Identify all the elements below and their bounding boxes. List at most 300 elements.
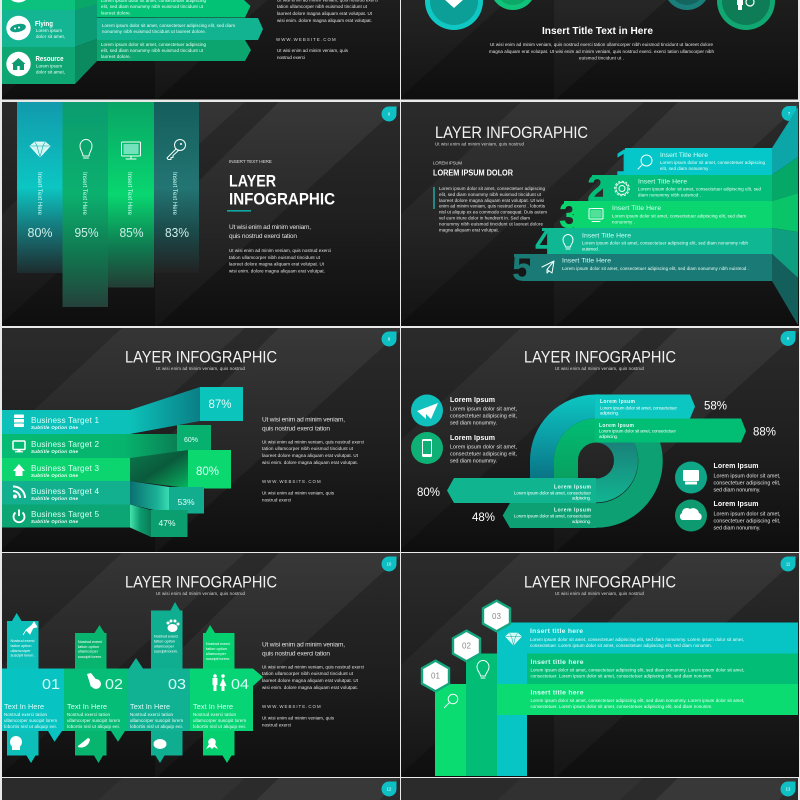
circle: green: [490, 0, 536, 10]
target 5 bar: [2, 504, 188, 537]
icon: bulb: [80, 140, 92, 158]
icon: gem: [30, 142, 50, 157]
target 4 bar: [2, 481, 204, 514]
step 3: Insert Title Here: [612, 205, 661, 212]
step 2: [587, 168, 772, 209]
segment 4: [190, 668, 263, 731]
text block: [229, 224, 331, 274]
text: upper left pair: consectetuer adipiscing elit,: [450, 414, 517, 420]
page badge: [780, 331, 796, 346]
target 2 bar: [2, 425, 211, 458]
step 4: euismod .: [582, 246, 600, 252]
text: upper left pair: Lorem Ipsum: [450, 397, 495, 404]
upper tab 4: tation option: [206, 647, 227, 651]
text block: laoreet dolore magna aliquam erat volutpat. Ut: [262, 453, 359, 458]
layered block with Flying and Resource: [2, 0, 97, 84]
text: upper left pair: sed diam nonummy.: [450, 458, 497, 464]
label: Resource: dolor sit amet,: [36, 70, 65, 74]
right text block: WWW.WEBSITE.COM: [276, 37, 337, 42]
icon: key: [167, 140, 186, 160]
subtitle: Ut wisi enim ad minim veniam, quis nostrud: [435, 142, 525, 146]
step 4: Insert Title Here: [582, 232, 631, 240]
segment 4: Nostrud exerci tation: [193, 712, 237, 717]
target labels: Business Target 2: [31, 440, 99, 449]
heading: LAYER INFOGRAPHIC: [524, 348, 676, 366]
heading: INFOGRAPHIC: [229, 190, 335, 208]
bar text 2: [530, 659, 744, 678]
step 1: elit, sed diam nonummy .: [660, 166, 711, 171]
text block: tation ullamcorper nibh euismod tincidunt ut: [262, 446, 354, 451]
column 2: 95%: [62, 102, 108, 307]
icon: airship: [6, 16, 31, 40]
icon: home: [13, 464, 25, 476]
heading: Insert Title Text in Here: [542, 25, 653, 37]
body text: euismod tincidunt ut .: [579, 56, 624, 60]
panel: slide 10: [2, 553, 400, 777]
step 2: 2: [587, 168, 608, 209]
icon: gem: [506, 633, 522, 645]
upper tab 1: tation option: [10, 644, 32, 648]
text block: Ut wisi enim ad minim veniam,: [262, 416, 345, 424]
text: lower right pair: consectetuer adipiscing elit,: [714, 518, 780, 524]
upper tab 4: suscipit lorem.: [206, 657, 230, 661]
hexagon 02: [453, 631, 480, 661]
label: Resource: Lorem ipsum: [36, 64, 62, 68]
segment 1: [2, 668, 64, 742]
layer columns and bars: [435, 622, 798, 776]
outer dark green band, 48%: [503, 406, 650, 528]
step 1: Lorem ipsum dolor sit amet, consectetuer adipiscing: [660, 160, 766, 165]
hexagon 03: 03: [492, 612, 501, 621]
side heading: [433, 160, 513, 178]
side heading: LOREM IPSUM: [433, 160, 462, 166]
lower tab 1: [7, 731, 38, 763]
arrow 1 with text: laoreet dolore.: [101, 10, 131, 16]
upper tab 3: ullamcorper: [154, 644, 175, 648]
page badge: [780, 782, 796, 796]
text: lower right pair: sed diam nonummy.: [714, 526, 760, 532]
page badge: 9: [787, 336, 790, 341]
side heading: LOREM IPSUM DOLOR: [433, 168, 513, 178]
icon circle: cloud: [675, 500, 707, 532]
segment 3: Nostrud exerci tation: [130, 712, 174, 717]
icon: monitor: [13, 441, 25, 452]
bar text 3: Insert title here: [530, 690, 584, 696]
hexagon 01: [422, 661, 449, 691]
panel: slide with circles and title (cropped): [401, 0, 798, 100]
upper tab 2: ullamcorper: [78, 650, 99, 654]
arrow 3 with text: laoreet dolore.: [101, 54, 131, 59]
upper tab 1: ullamcorper: [10, 649, 31, 653]
upper tab 2: Nostrud exerci: [78, 640, 102, 644]
inner teal-green band, 80%: [447, 430, 626, 503]
target labels: Subtitle Option One: [31, 425, 79, 430]
right text block: [276, 0, 378, 60]
band labels: Lorem ipsum dolor sit amet, consectetuer: [514, 490, 592, 495]
text: upper left pair: Lorem Ipsum: [450, 435, 495, 442]
step 3: 3: [559, 195, 580, 236]
text block: [262, 416, 364, 502]
upper tab 2: suscipit lorem.: [78, 655, 102, 659]
text: upper left pair: consectetuer adipiscing elit,: [450, 452, 517, 458]
subtitle: Ut wisi enim ad minim veniam, quis nostrud: [555, 366, 645, 371]
upper tab 4: Nostrud exerci: [206, 642, 230, 646]
text block: wisi enim. dolore magna aliquam erat volutpat.: [262, 460, 358, 465]
spiral chart: [447, 394, 746, 528]
icon: people: [212, 674, 226, 691]
bar text 2: consectetuer. Lorem ipsum dolor sit amet, consectetuer adipiscing elit, sed diam nonumm.: [530, 674, 712, 678]
target 1 bar: 87%: [208, 399, 232, 411]
right text block: tation ullamcorper nibh euismod tincidunt ut: [277, 4, 368, 9]
percentages: 48%: [472, 512, 495, 524]
percentages: 58%: [704, 400, 727, 412]
label: Flying: Lorem ipsum: [36, 28, 62, 33]
text block: Ut wisi enim ad minim veniam,: [229, 224, 311, 231]
page badge: 12: [387, 786, 392, 792]
page badge: 8: [388, 336, 391, 342]
column 3: 85%: 85%: [120, 226, 144, 240]
segment 4: 04: [231, 677, 249, 693]
step 5: [512, 248, 772, 288]
heading: LAYER INFOGRAPHIC: [125, 572, 277, 592]
right text block: nostrud exerci: [277, 55, 305, 60]
arrow 2 with text: Lorem ipsum dolor sit amet, consectetuer adipiscing elit, sed diam: [102, 23, 235, 28]
icon circle: phone: [411, 432, 443, 464]
text: lower right pair: Lorem ipsum dolor sit amet,: [714, 512, 780, 518]
page badge: [780, 556, 796, 572]
paragraph: elit, sed diam nonummy nibh euismod tincidunt ut: [439, 192, 542, 197]
band labels: Lorem Ipsum: [554, 508, 592, 514]
text block: WWW.WEBSITE.COM: [262, 479, 322, 484]
segment 1: ullamcorper suscipit lorem: [4, 718, 57, 723]
lower tab 2: [75, 731, 106, 763]
segment 1: Nostrud exerci tation: [4, 712, 48, 717]
circle: dark teal: [664, 0, 710, 10]
upper tab 1: [7, 613, 38, 669]
icon: cupcake: [10, 736, 22, 750]
upper tab 2: tation option: [78, 645, 99, 649]
target labels: Subtitle Option One: [31, 449, 79, 454]
body text: Ut wisi enim ad minim veniam, quis nostrud exerci tation ullamcorper nibh euismod tincidunt ut laoreet dolore: [490, 42, 713, 47]
panel: slide 9: [401, 328, 799, 552]
band labels: Lorem Ipsum: [599, 423, 635, 429]
paragraph: vel eum iriure dolor in hendrerit in. Sed diam: [439, 216, 530, 220]
arrow 3 with text: Lorem ipsum dolor sit amet, consectetuer adipiscing: [101, 42, 207, 47]
panel: slide 12 (cropped): [2, 778, 400, 800]
text block: nostrud exerci: [262, 722, 291, 728]
column 1: 80%: 80%: [28, 226, 52, 240]
segment 4: Text In Here: [193, 702, 233, 711]
text block: [262, 642, 364, 728]
text block: wisi enim. dolore magna aliquam erat volutpat.: [262, 685, 358, 690]
panel: slide 11: [401, 553, 799, 777]
band labels: Lorem ipsum dolor sit amet, consectetuer: [600, 406, 678, 410]
bar text 2: Lorem ipsum dolor sit amet, consectetuer adipiscing elit, sed diam nonummy. Lorem ipsum dolor sit amet,: [530, 668, 744, 672]
upper tab 4: ullamcorper: [206, 652, 227, 656]
text: lower right pair: Lorem Ipsum: [714, 463, 758, 470]
text block: laoreet dolore magna aliquam erat volutpat. Ut: [229, 262, 325, 266]
icon: server: [14, 414, 24, 427]
lower tab 4: [203, 731, 234, 763]
step 2: Insert Title Here: [638, 178, 687, 186]
column 2: 95%: Insert Text Here: [81, 172, 87, 216]
target 3 bar: 80%: [196, 466, 219, 478]
upper tab 4: [203, 625, 234, 669]
column 2: 95%: 95%: [74, 226, 98, 240]
column 3: 85%: Insert Text Here: [126, 172, 132, 216]
icon: pin: [23, 622, 37, 635]
step 5: 5: [512, 248, 533, 288]
target 4 bar: 53%: [178, 497, 195, 507]
text block: wisi enim. dolore magna aliquam erat volutpat.: [229, 268, 325, 274]
step 4: 4: [535, 221, 556, 262]
step 4: [535, 221, 772, 262]
text block: Ut wisi enim ad minim veniam, quis: [262, 716, 335, 720]
page badge: [382, 782, 396, 796]
page badge: 7: [788, 111, 791, 116]
column 4: 83%: 83%: [165, 226, 189, 240]
subtitle: Ut wisi enim ad minim veniam, quis nostrud: [156, 591, 246, 596]
text: lower right pair: sed diam nonummy.: [714, 488, 760, 494]
icon: bulb: [563, 234, 573, 249]
page badge: 10: [387, 562, 392, 566]
text block: tation ullamcorper nibh euismod tincidunt ut: [229, 255, 321, 260]
text: upper left pair: [450, 397, 517, 464]
band labels: Lorem Ipsum: [554, 484, 592, 490]
text block: Ut wisi enim ad minim veniam, quis nostrud exerci: [262, 664, 364, 670]
bar text 3: [530, 690, 744, 709]
paragraph: nonummy nibh euismod tincidunt ut laoreet dolore: [439, 222, 543, 226]
step 2: Lorem ipsum dolor sit amet, consectetuer adipiscing elit, sed: [638, 186, 762, 191]
right text block: wisi enim. dolore magna aliquam erat volutpat.: [277, 18, 372, 23]
upper tab 3: suscipit lorem.: [154, 650, 178, 654]
paragraph: magna aliquam erat volutpat.: [439, 228, 499, 232]
segment 2: Nostrud exerci tation: [67, 712, 111, 717]
circle: teal gem: [425, 0, 483, 30]
band labels: Lorem Ipsum: [600, 399, 636, 405]
icon: paper plane: [542, 261, 554, 273]
target 1 bar: [2, 387, 243, 434]
target labels: Business Target 1: [31, 416, 99, 425]
icon: octopus: [206, 738, 218, 749]
panel: slide 6: [2, 102, 400, 326]
segment 4: ullamcorper suscipit lorem: [193, 718, 246, 723]
body text: [489, 42, 714, 60]
step 3: [559, 195, 772, 236]
text block: nostrud exerci: [262, 498, 291, 502]
panel: slide 7: [401, 102, 799, 326]
segment 3: lobortis nisl ut aliquip eei.: [130, 724, 183, 729]
bar text 1: Insert title here: [530, 628, 583, 635]
arrow 2 with text: nonummy nibh euismod tincidunt ut laoreet dolore.: [102, 29, 206, 34]
segment 1: 01: [42, 677, 60, 693]
segment 3: Text In Here: [130, 702, 170, 711]
text block: quis nostrud exerci tation: [262, 650, 330, 658]
panel: slide 8: [2, 328, 400, 552]
heading: LAYER: [229, 172, 276, 190]
paragraph: [439, 186, 547, 232]
text block: tation ullamcorper nibh euismod tincidunt ut: [262, 671, 354, 676]
page badge: 6: [388, 112, 391, 116]
arrow 2 with text: [97, 18, 263, 40]
label: Flying: [35, 21, 65, 39]
side fan wedges: [772, 107, 798, 325]
band labels: adipiscing.: [572, 519, 591, 524]
hexagon 01: 01: [431, 672, 440, 681]
arrow 1 with text: elit, sed diam nonummy nibh euismod tincidunt ut: [101, 4, 204, 9]
bar text 3: Lorem ipsum dolor sit amet, consectetuer adipiscing elit, sed diam nonummy. Lorem ipsum dolor sit amet,: [530, 698, 744, 703]
target 3 bar: [2, 450, 231, 488]
text: lower right pair: consectetuer adipiscing elit,: [714, 480, 780, 486]
text: lower right pair: [714, 463, 780, 532]
heading: LAYER INFOGRAPHIC: [524, 572, 676, 592]
step 4: Lorem ipsum dolor sit amet, consectetuer adipiscing elit, sed diam nonummy nibh: [582, 240, 749, 245]
icon: resource building: [6, 52, 31, 76]
band labels: Lorem ipsum dolor sit amet, consectetuer: [514, 514, 592, 518]
band labels: Lorem ipsum dolor sit amet, consectetuer: [599, 428, 677, 434]
bar text 1: Lorem ipsum dolor sit amet, consectetuer adipiscing elit, sed diam nonummy. Lorem ipsum dolor sit amet,: [530, 637, 744, 642]
label: Resource: [36, 56, 65, 74]
hexagon 03: [483, 601, 510, 631]
text block: Ut wisi enim ad minim veniam, quis nostrud exerci: [262, 440, 364, 444]
step 3: nonummy .: [612, 220, 635, 224]
icon: box: [154, 739, 166, 749]
upper tab 3: tation option: [154, 640, 175, 644]
segment 2: lobortis nisl ut aliquip eei.: [67, 724, 120, 729]
circle: green megaphone: [717, 0, 775, 30]
icon: search: [638, 155, 652, 169]
text: upper left pair: Lorem ipsum dolor sit amet,: [450, 444, 517, 450]
segment 2: [64, 668, 127, 742]
text block: Ut wisi enim ad minim veniam, quis nostrud exerci: [229, 248, 331, 253]
segment 2: ullamcorper suscipit lorem: [67, 718, 120, 723]
icon circle: paper plane: [411, 394, 443, 426]
text block: laoreet dolore magna aliquam erat volutpat. Ut: [262, 678, 359, 683]
icon: gear: [615, 181, 629, 196]
text: upper left pair: Lorem ipsum dolor sit amet,: [450, 406, 517, 412]
segment 3: 03: [168, 677, 186, 693]
page badge: [382, 556, 396, 572]
hexagon 02: 02: [462, 642, 471, 651]
body text: magna aliquam erat volutpat. Ut wisi enim ad minim veniam, quis nostrud exerci. exerci tation ullamcorper nibh: [489, 49, 714, 54]
step 1: Insert Title Here: [660, 152, 708, 159]
bar text 1: [530, 628, 744, 648]
column 1: 80%: Insert Text Here: [36, 172, 42, 216]
target labels: [31, 416, 99, 524]
icon: rss: [13, 486, 25, 498]
step 5: Insert Title Here: [562, 258, 611, 264]
icon circle: monitor: [675, 462, 707, 494]
paragraph: laoreet dolore magna aliquam erat volutpat. Ut wisi: [439, 198, 544, 203]
icon: search: [444, 694, 458, 708]
upper tab 2: [75, 625, 106, 669]
band labels: adipiscing.: [600, 410, 619, 416]
text: lower right pair: Lorem Ipsum: [714, 501, 758, 508]
panel: slide 13 (cropped): [401, 778, 798, 800]
band labels: adipiscing.: [599, 434, 618, 439]
target labels: Subtitle Option One: [31, 496, 79, 501]
accent rule: [227, 210, 251, 212]
target labels: Business Target 3: [31, 464, 99, 473]
target 2 bar: 60%: [184, 435, 198, 444]
label: Resource: Resource: [36, 56, 64, 63]
text: lower right pair: Lorem ipsum dolor sit amet,: [714, 474, 780, 480]
subtitle: Ut wisi enim ad minim veniam, quis nostrud: [156, 366, 246, 371]
right text block: Ut wisi enim ad minim veniam, quis: [277, 48, 349, 53]
step 5: Lorem ipsum dolor sit amet, consectetuer adipiscing elit, sed diam nonummy nibh euismod .: [562, 266, 749, 271]
page badge: 13: [786, 786, 791, 792]
segment 1: Text In Here: [4, 702, 44, 711]
target labels: Subtitle Option One: [31, 519, 79, 524]
percentages: [417, 400, 776, 524]
arrow 1 with text: [97, 0, 250, 18]
segment 1: lobortis nisl ut aliquip eei.: [4, 724, 57, 729]
label: Flying: Flying: [35, 21, 53, 28]
target labels: Business Target 4: [31, 487, 99, 496]
segment 3: [127, 658, 190, 731]
outer teal band, 58%: [542, 394, 695, 478]
bar text 3: consectetuer. Lorem ipsum dolor sit amet, consectetuer adipiscing elit, sed diam nonumm.: [530, 704, 712, 709]
lower tab 3: [151, 731, 182, 763]
step 3: Lorem ipsum dolor sit amet, consectetuer adipiscing elit, sed diam: [612, 213, 746, 218]
text: upper left pair: sed diam nonummy.: [450, 420, 497, 426]
percentages: 80%: [417, 487, 440, 499]
segment 4: lobortis nisl ut aliquip eei.: [193, 724, 246, 729]
label: Flying: dolor sit amet,: [36, 34, 65, 39]
subtitle: Ut wisi enim ad minim veniam, quis nostrud: [555, 591, 645, 596]
column 1: 80%: [17, 102, 62, 273]
icon: watermelon: [78, 738, 90, 748]
icon: bulb: [477, 660, 489, 678]
inner green band, 88%: [566, 418, 746, 478]
upper tab 3: [151, 602, 182, 669]
heading: LAYER INFOGRAPHIC: [125, 348, 277, 366]
target 5 bar: 47%: [158, 518, 176, 528]
right text block: laoreet dolore magna aliquam erat volutpat. Ut: [277, 11, 373, 16]
paragraph: enim ad minim veniam, quis nostrud exerci . lobortis: [439, 204, 546, 208]
text block: WWW.WEBSITE.COM: [262, 704, 322, 709]
icon: power: [14, 510, 24, 522]
segment 2: 02: [105, 677, 123, 693]
icon: monitor: [122, 142, 140, 159]
target labels: Business Target 5: [31, 510, 99, 519]
column 3: 85%: [108, 102, 154, 288]
panel: slide 5 resources (cropped): [2, 0, 400, 100]
icon: monitor: [589, 208, 603, 222]
heading: LAYER INFOGRAPHIC: [435, 123, 588, 142]
column 4: 83%: [154, 102, 199, 273]
band labels: [514, 399, 678, 524]
bar text 2: Insert title here: [530, 659, 584, 666]
text block: Ut wisi enim ad minim veniam,: [262, 642, 345, 648]
band labels: adipiscing.: [572, 496, 591, 501]
step 2: diam nonummy nibh euismod .: [638, 192, 701, 198]
text block: Ut wisi enim ad minim veniam, quis: [262, 490, 335, 496]
column 4: 83%: Insert Text Here: [171, 172, 177, 216]
bar text 1: consectetuer. Lorem ipsum dolor sit amet, consectetuer adipiscing elit, sed diam nonumm.: [530, 643, 712, 648]
target labels: Subtitle Option One: [31, 473, 79, 478]
step 1: [615, 142, 772, 183]
kicker: INSERT TEXT HERE: [229, 159, 272, 165]
page badge: [382, 106, 396, 122]
accent bar: [433, 187, 435, 209]
text block: quis nostrud exerci tation: [262, 426, 330, 432]
page badge: [782, 106, 796, 121]
segment 2: Text In Here: [67, 702, 107, 711]
icon: paw: [166, 620, 180, 632]
icon: bird: [87, 673, 101, 689]
upper tab 3: Nostrud exerci: [154, 634, 178, 638]
